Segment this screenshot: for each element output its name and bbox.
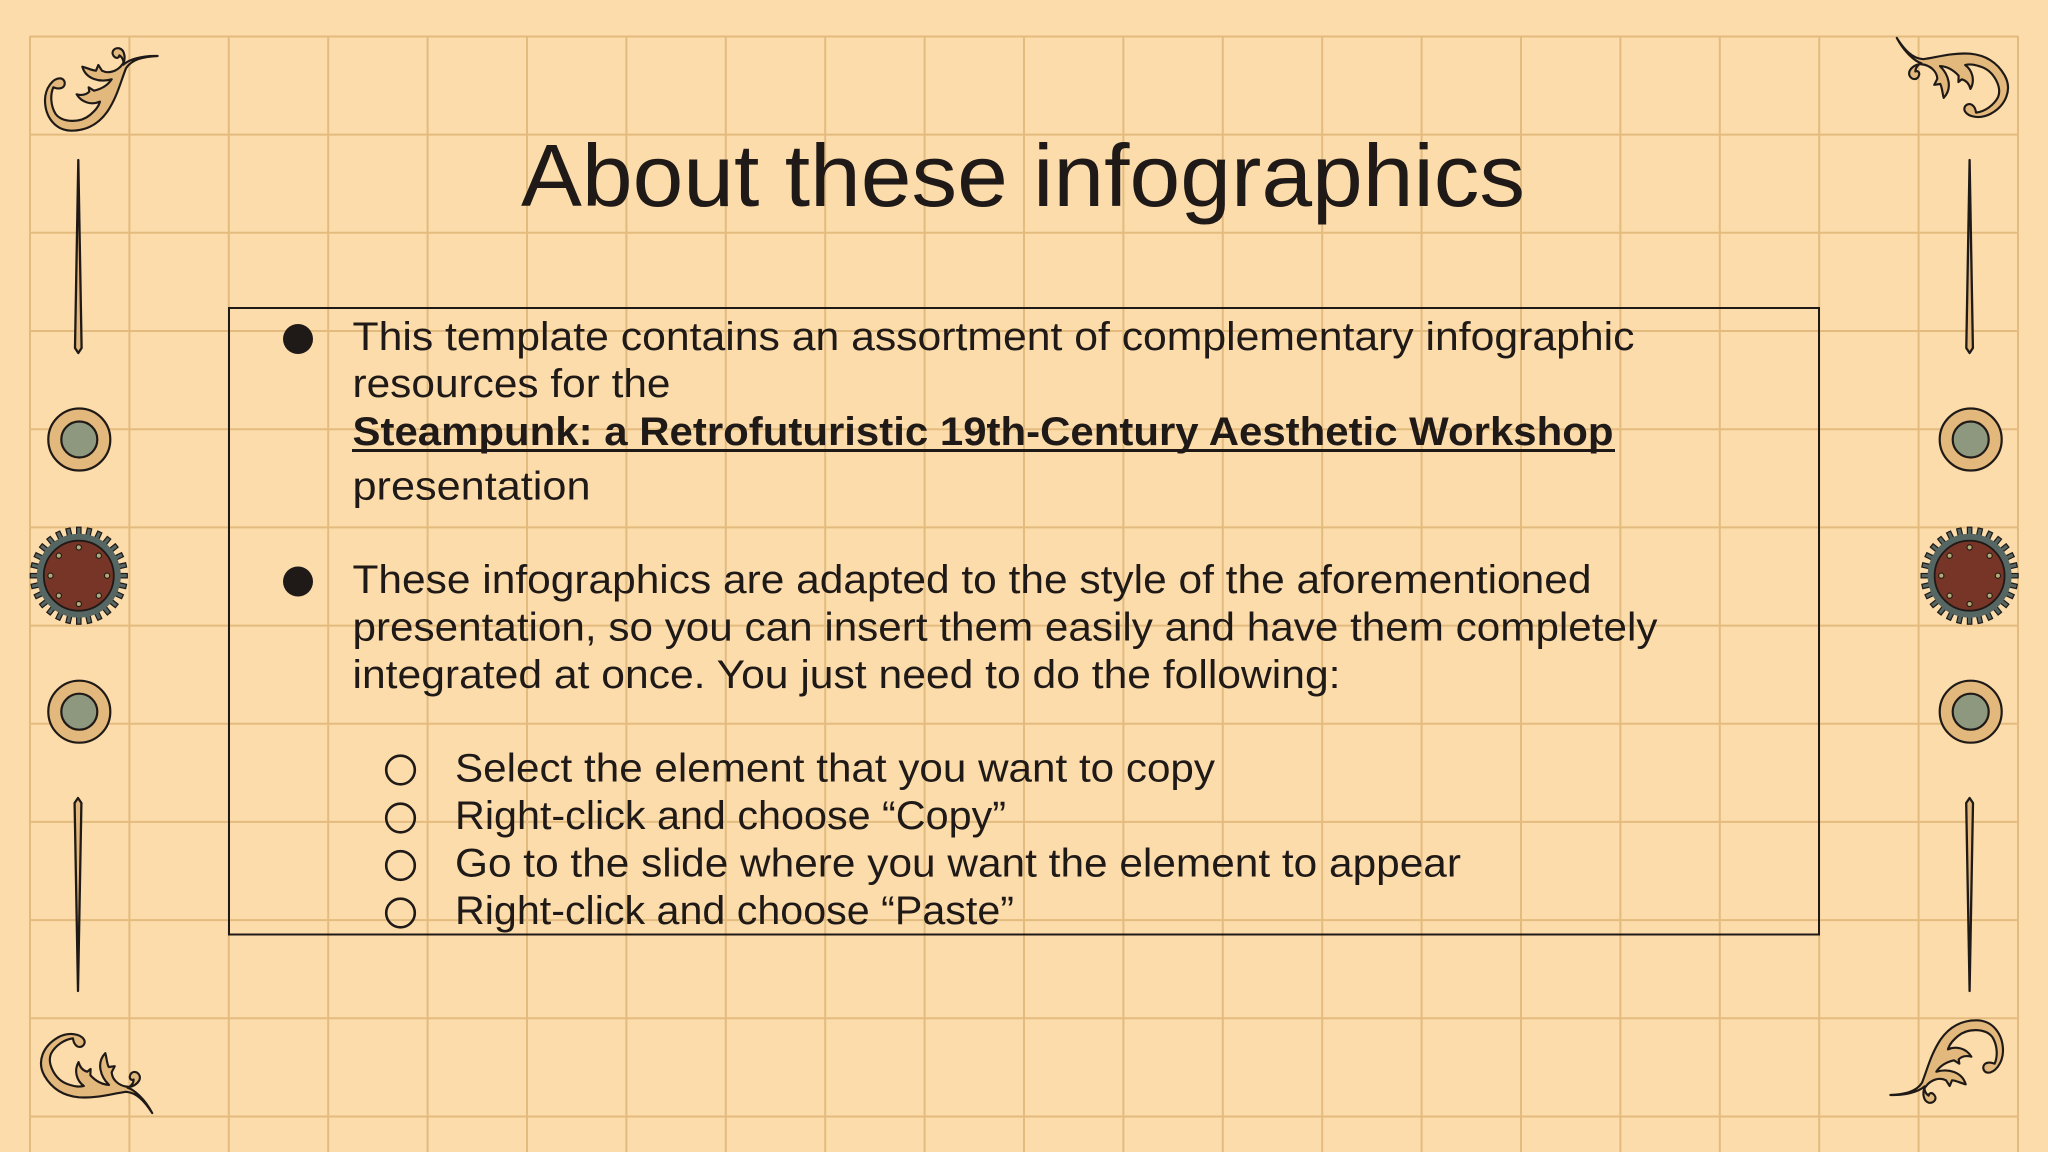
text block: first paragraph: This template contains an assortment of complementary infographic bbox=[352, 315, 1634, 359]
sub-list: steps: Go to the slide where you want the element to appear bbox=[455, 842, 1461, 886]
sub-list: steps: Select the element that you want to copy bbox=[455, 746, 1215, 790]
bullet one bbox=[283, 324, 313, 354]
text block: first paragraph: resources for the bbox=[352, 362, 670, 406]
text block: second paragraph bbox=[352, 558, 1658, 697]
icon: left gear bbox=[30, 527, 127, 624]
panel: text box bbox=[229, 308, 1819, 934]
icon: left upper rivet bbox=[48, 408, 110, 470]
icon: right bottom needle bbox=[1966, 798, 1973, 991]
title: About these infographics bbox=[521, 126, 1525, 225]
bullet two bbox=[283, 566, 313, 596]
icon: left bottom needle bbox=[75, 798, 81, 991]
text block: second paragraph: These infographics are adapted to the style of the aforementioned bbox=[352, 558, 1592, 602]
icon: corner flourish bottom right bbox=[1890, 1020, 2003, 1103]
text block: second paragraph: integrated at once. You just need to do the following: bbox=[352, 653, 1340, 697]
icon: corner flourish bottom left bbox=[31, 1012, 159, 1150]
icon: right upper rivet bbox=[1940, 408, 2002, 470]
text block: first paragraph: presentation bbox=[352, 464, 590, 508]
text block: first paragraph bbox=[352, 315, 1634, 508]
sub-list: steps bbox=[386, 746, 1461, 933]
icon: left top needle bbox=[75, 160, 82, 353]
text block: first paragraph: Steampunk: a Retrofuturistic 19th-Century Aesthetic Workshop bbox=[352, 410, 1613, 454]
icon: corner flourish top right bbox=[1890, 1, 2018, 139]
sub-list: steps: Right-click and choose “Copy” bbox=[455, 794, 1006, 838]
sub-list: steps: Right-click and choose “Paste” bbox=[455, 889, 1014, 933]
icon: right top needle bbox=[1966, 160, 1973, 353]
icon: corner flourish top left bbox=[45, 48, 158, 131]
icon: right gear bbox=[1921, 527, 2018, 624]
icon: right lower rivet bbox=[1940, 681, 2002, 743]
text block: second paragraph: presentation, so you can insert them easily and have them completely bbox=[352, 606, 1658, 650]
icon: left lower rivet bbox=[48, 681, 110, 743]
